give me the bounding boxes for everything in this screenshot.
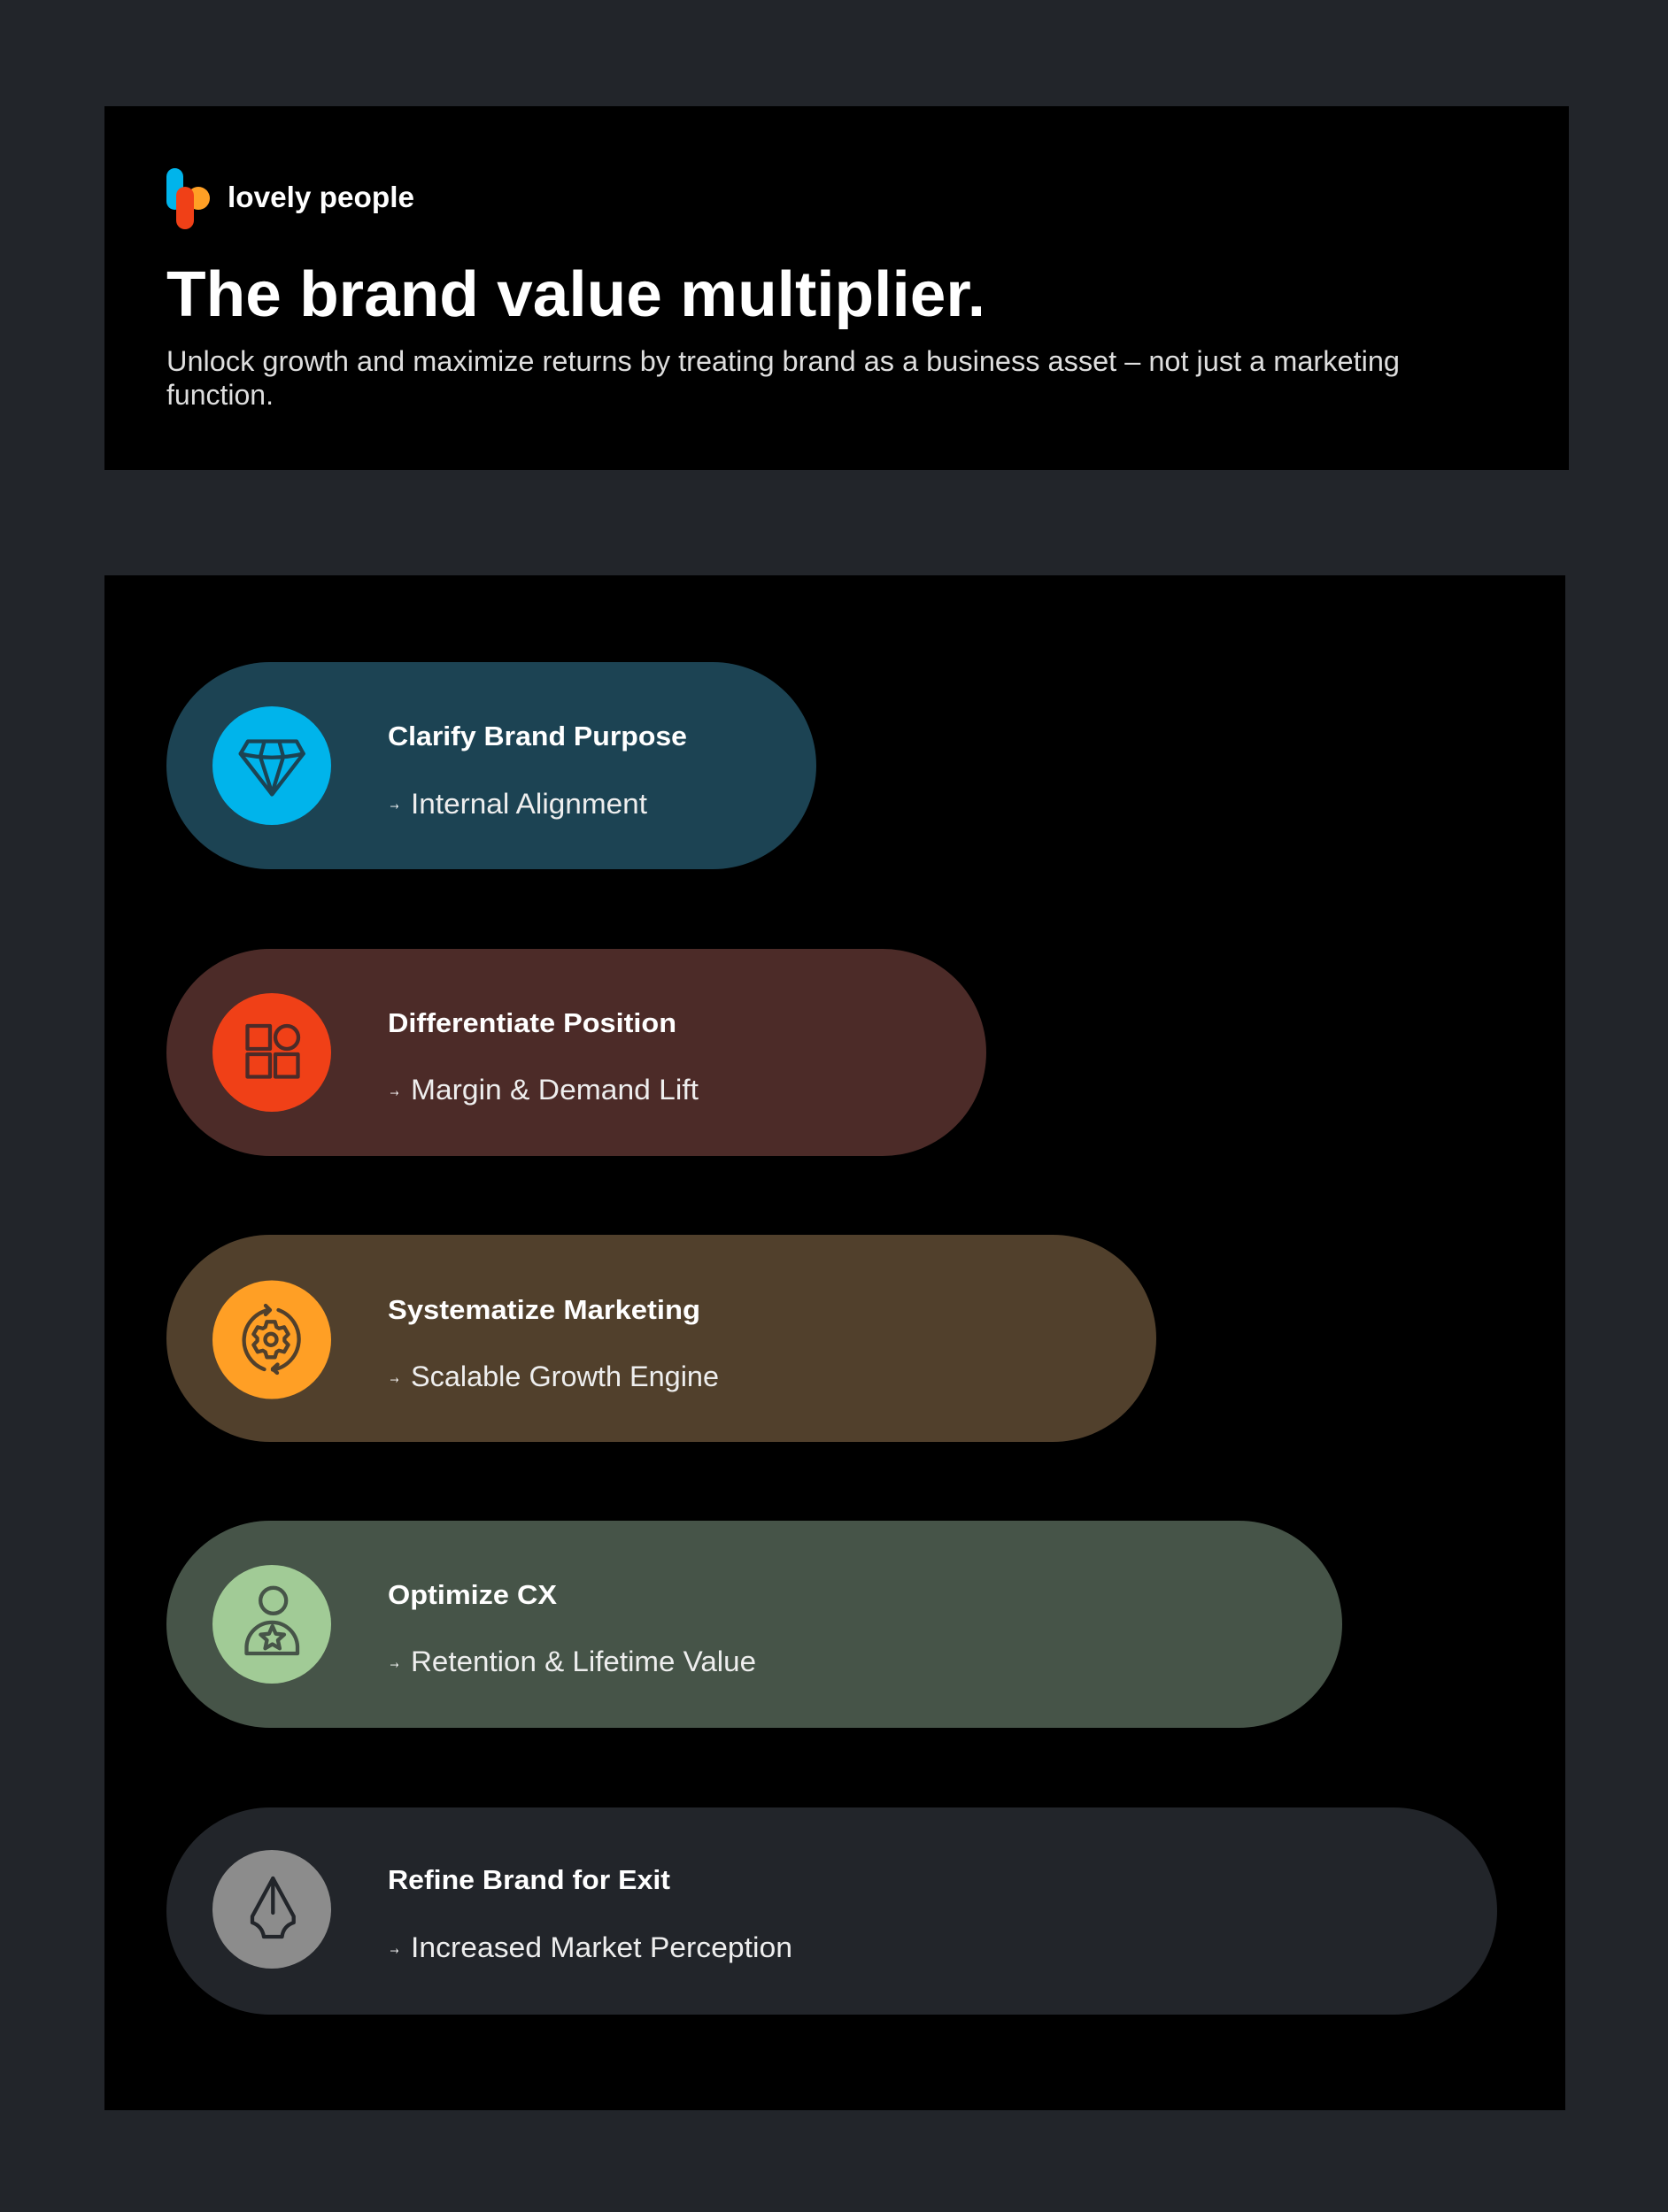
outcome: Margin & Demand Lift <box>411 1074 699 1106</box>
outcome: → <box>388 1936 401 1959</box>
outcome: → <box>388 791 401 814</box>
step 4: optimize cx <box>166 1521 1342 1728</box>
icon: person with star <box>212 1565 331 1684</box>
heading: Clarify Brand Purpose <box>388 721 687 751</box>
outcome: → <box>388 1365 401 1388</box>
icon: diamond <box>212 706 331 825</box>
outcome: Internal Alignment <box>411 788 647 820</box>
panel: header <box>104 106 1569 470</box>
title: The brand value multiplier. <box>166 259 985 330</box>
subtitle: function. <box>166 379 274 411</box>
heading: Differentiate Position <box>388 1007 676 1038</box>
outcome: → <box>388 1650 401 1673</box>
subtitle <box>166 345 1400 411</box>
step 5: refine brand for exit <box>166 1807 1497 2015</box>
icon: shapes grid <box>212 993 331 1112</box>
subtitle: Unlock growth and maximize returns by treating brand as a business asset – not just a marketing <box>166 345 1400 377</box>
logo wordmark: lovely people <box>228 181 414 213</box>
step 1: clarify brand purpose <box>166 662 816 869</box>
outcome: Increased Market Perception <box>411 1931 792 1963</box>
panel: value steps <box>104 575 1565 2110</box>
logo mark <box>166 168 210 229</box>
heading: Optimize CX <box>388 1579 557 1610</box>
icon: pen nib <box>212 1850 331 1969</box>
heading: Systematize Marketing <box>388 1294 700 1325</box>
logo <box>166 168 414 229</box>
outcome: Retention & Lifetime Value <box>411 1646 756 1677</box>
icon: gear cycle <box>212 1280 331 1399</box>
step 3: systematize marketing <box>166 1235 1156 1442</box>
step 2: differentiate position <box>166 949 986 1156</box>
outcome: Scalable Growth Engine <box>411 1360 719 1392</box>
heading: Refine Brand for Exit <box>388 1864 670 1895</box>
outcome: → <box>388 1078 401 1101</box>
